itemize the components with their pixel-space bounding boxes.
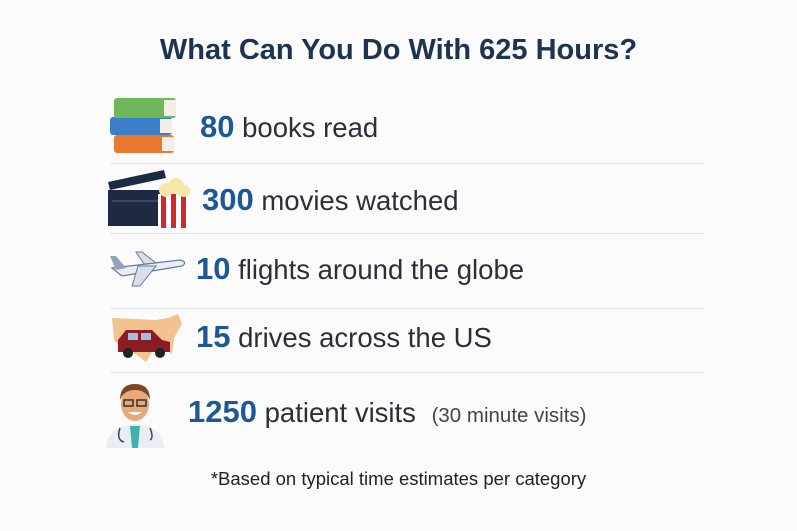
row: drives: 15 drives across the US bbox=[196, 319, 492, 354]
icon: doctor bbox=[106, 384, 164, 448]
row: flights: 10 flights around the globe bbox=[196, 251, 524, 286]
icon: car on US map bbox=[112, 314, 182, 362]
row: patient visits: 1250 patient visits (30 minute visits) bbox=[188, 394, 587, 429]
footnote: *Based on typical time estimates per category bbox=[211, 468, 586, 489]
icon: clapper and popcorn bbox=[108, 170, 190, 228]
row: books: 80 books read bbox=[200, 109, 378, 144]
icon: airplane bbox=[110, 252, 186, 286]
row: movies: 300 movies watched bbox=[202, 182, 459, 217]
icon: books bbox=[110, 98, 176, 153]
title: What Can You Do With 625 Hours? bbox=[160, 34, 637, 66]
